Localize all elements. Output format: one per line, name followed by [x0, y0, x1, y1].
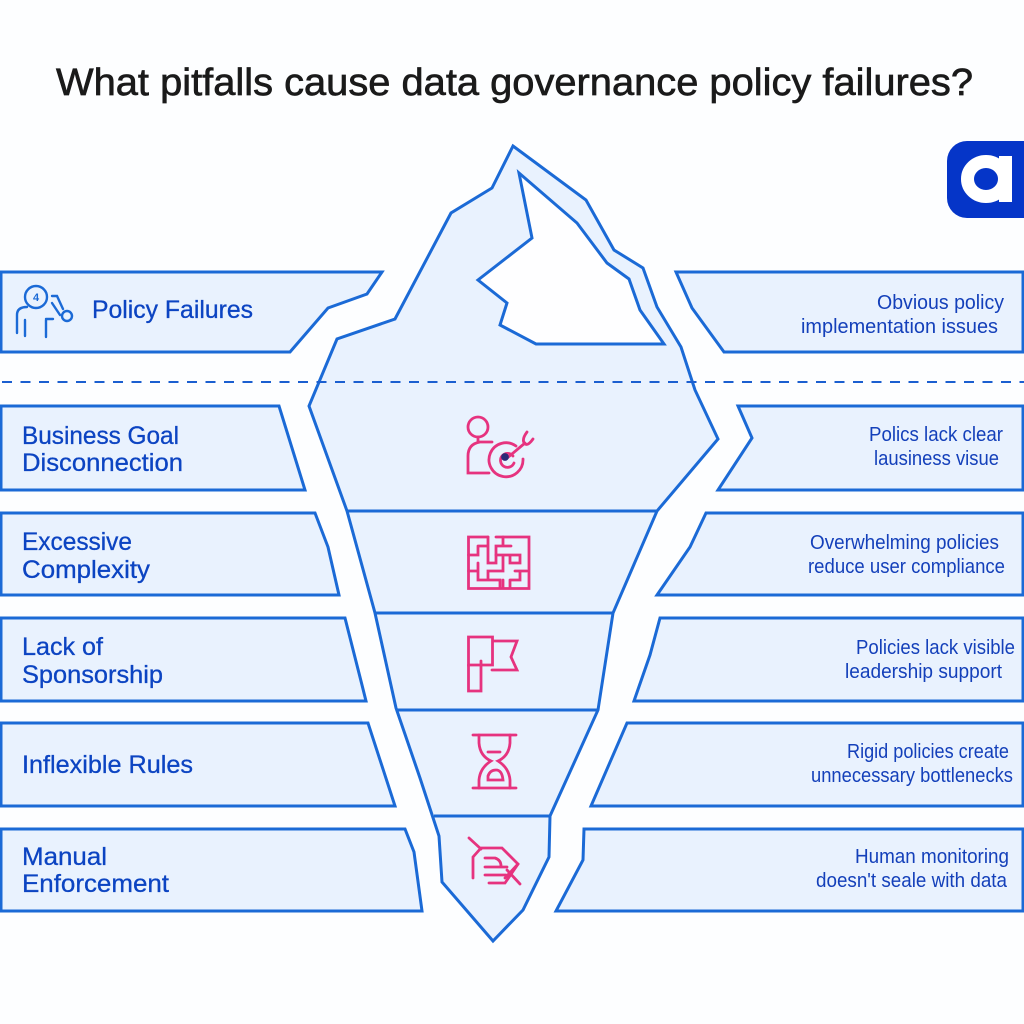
icon: person with circuit: 4 [33, 292, 40, 304]
icon: flag [468, 637, 517, 691]
panel: excessive complexity [1, 513, 339, 595]
panel: inflexible rules [1, 723, 395, 806]
panel: manual enforcement [1, 829, 422, 911]
icon: hand crossed [469, 838, 520, 884]
panel: human monitoring [556, 829, 1023, 911]
description: Rigid policies create [847, 741, 1009, 763]
description: doesn't seale with data [816, 870, 1008, 892]
label: Manual [22, 843, 107, 871]
icon: person and target [468, 417, 533, 477]
iceberg layer dividers [347, 511, 657, 816]
panel: lack of sponsorship [1, 618, 366, 701]
panel: overwhelming policies [657, 513, 1023, 595]
description: Human monitoring [855, 846, 1009, 868]
title: What pitfalls cause data governance policy failures? [56, 62, 973, 104]
panel: leadership support [634, 618, 1023, 701]
label: Business Goal [22, 422, 179, 450]
icon: maze [468, 537, 529, 588]
description: Overwhelming policies [810, 532, 999, 554]
iceberg [309, 146, 718, 941]
panel: rigid policies [591, 723, 1023, 806]
description: lausiness visue [874, 448, 999, 470]
description: implementation issues [801, 316, 998, 338]
label: Sponsorship [22, 661, 163, 689]
panel: lack of clarity [718, 406, 1023, 490]
description: leadership support [845, 661, 1002, 683]
logo [947, 141, 1024, 218]
label: Disconnection [22, 449, 183, 477]
icon: hourglass [473, 735, 516, 788]
iceberg outline [309, 146, 718, 941]
label: Lack of [22, 633, 103, 661]
label: Policy Failures [92, 296, 253, 324]
description: Polics lack clear [869, 424, 1003, 446]
description: reduce user compliance [808, 556, 1005, 578]
label: Inflexible Rules [22, 751, 193, 779]
panel: policy failures [1, 272, 382, 352]
panel: business goal disconnection [1, 406, 305, 490]
iceberg snow cap [478, 173, 664, 344]
label: Complexity [22, 556, 151, 584]
description: Obvious policy [877, 292, 1004, 314]
label: Enforcement [22, 870, 169, 898]
label: Excessive [22, 528, 132, 556]
icon: person with circuit [17, 286, 72, 337]
waterline [2, 381, 1024, 383]
description: Policies lack visible [856, 637, 1015, 659]
panel: obvious issues [676, 272, 1023, 352]
